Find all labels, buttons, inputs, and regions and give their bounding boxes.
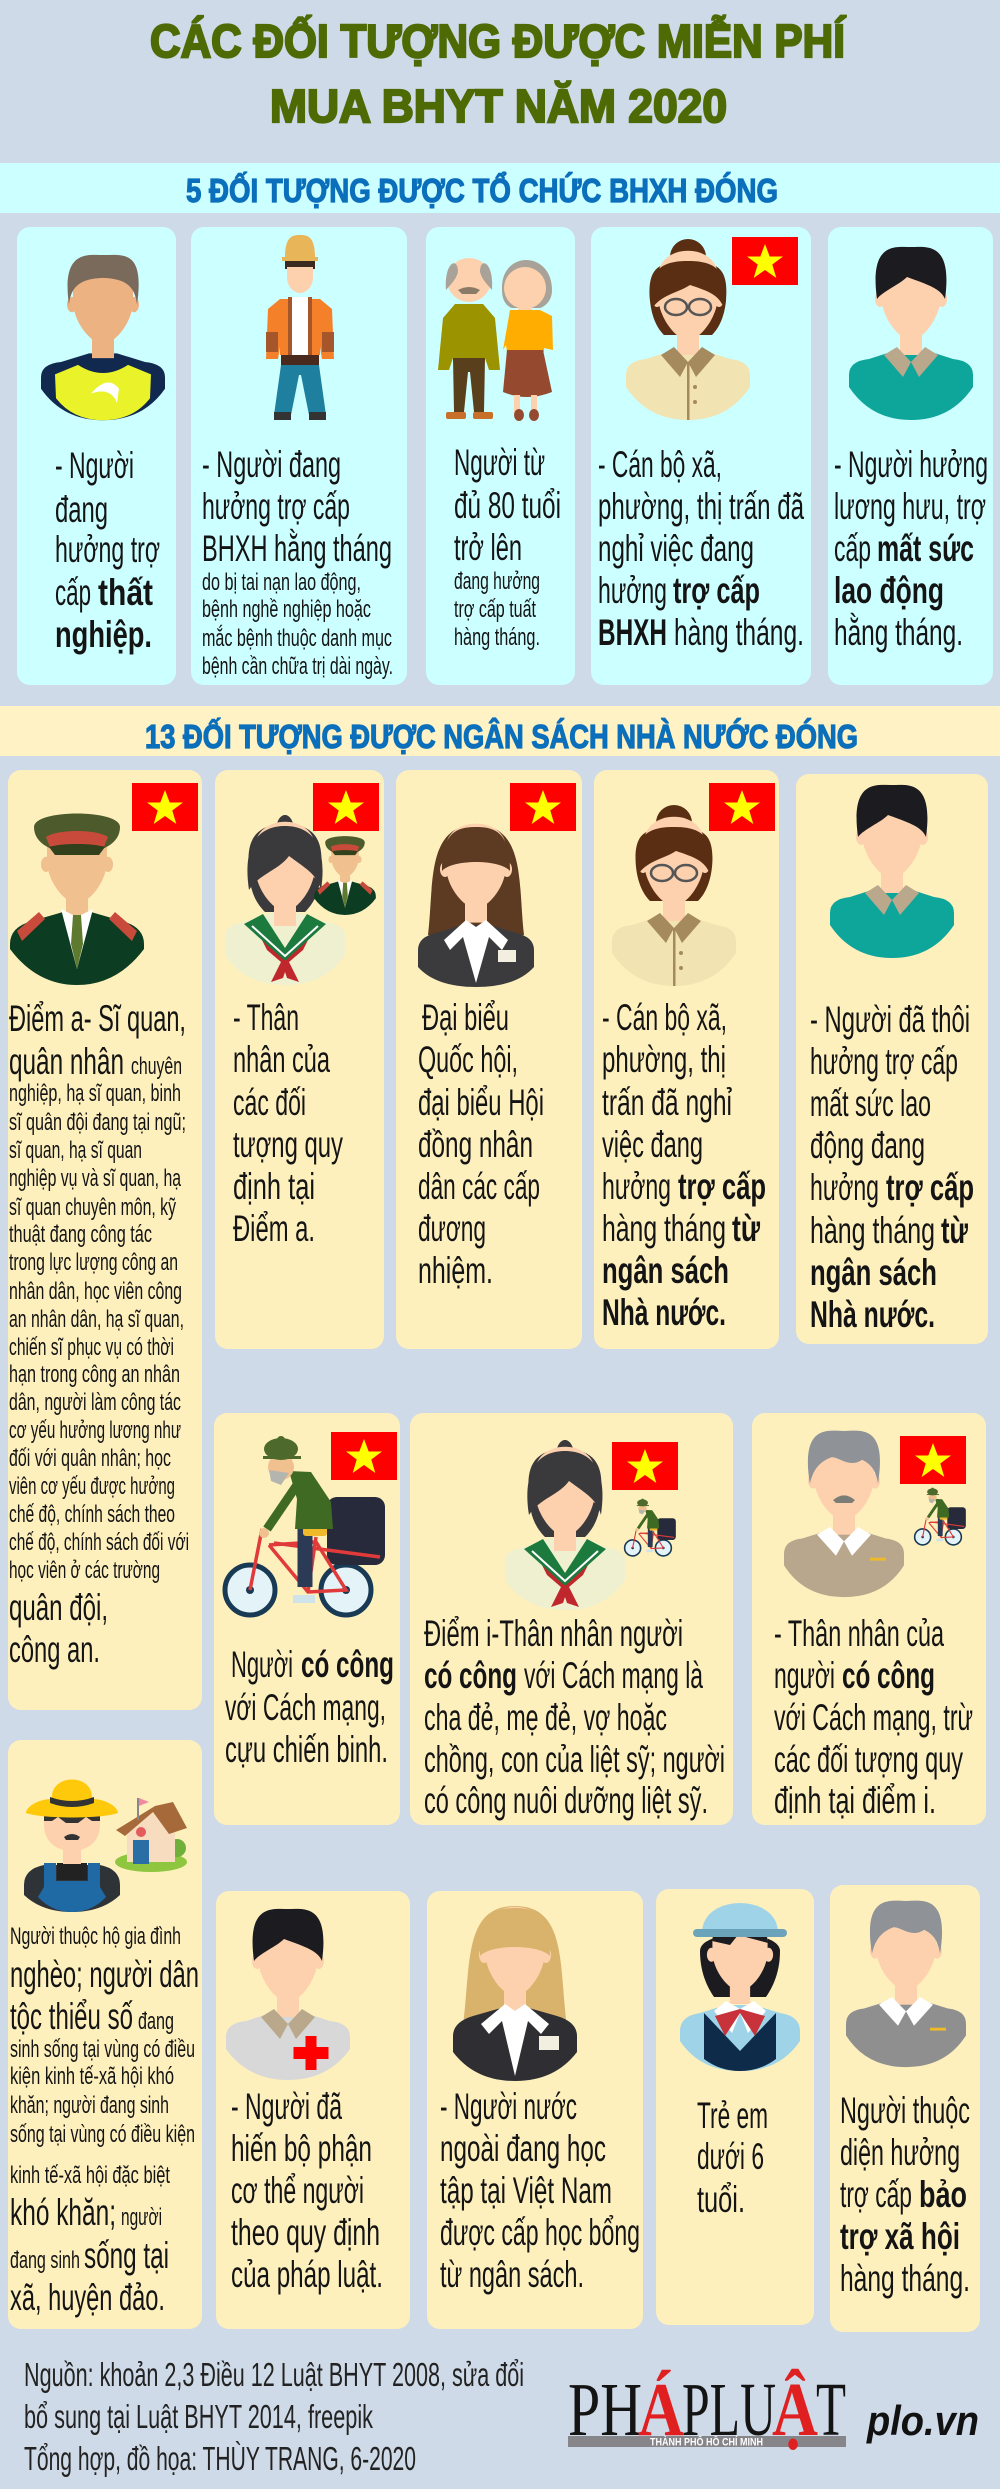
text: poor households and ethnic minorities: kinh tế-xã hội đặc biệt (10, 2162, 170, 2189)
text: unemployed: hưởng trợ (55, 529, 160, 570)
logo: Pháp Luật: T (816, 2368, 846, 2452)
text: children under 6: tuổi. (697, 2179, 745, 2220)
text: officers and soldiers: chế độ, chính sách theo (9, 1501, 175, 1528)
text: officers and soldiers: quân đội, (9, 1587, 108, 1628)
text: unemployed: thất (98, 572, 153, 613)
text: aged 80 and over: trở lên (454, 527, 522, 568)
icon: man with red cross (226, 1909, 350, 2080)
source credits: bổ sung tại Luật BHYT 2014, freepik (24, 2398, 373, 2435)
panel: people with revolutionary merit (214, 1413, 400, 1825)
text: social protection allowance: trợ cấp (840, 2174, 912, 2215)
text: work capacity loss allowance: từ (941, 1210, 968, 1251)
text: relatives of soldiers: - Thân (233, 997, 299, 1038)
text: retired commune officials: hưởng (598, 570, 667, 611)
text: relatives of merit people (774, 1613, 973, 1821)
section band: 13 groups paid by state budget (0, 706, 1000, 756)
panel: national assembly deputies (396, 770, 582, 1349)
text: organ donors: cơ thể người (231, 2170, 364, 2211)
panel: relatives of soldiers (215, 770, 384, 1349)
text: relatives of martyrs: có công nuôi dưỡng liệt sỹ. (424, 1780, 708, 1821)
text: relatives of martyrs: chồng, con của liệt sỹ; người (424, 1739, 725, 1780)
logo: Pháp Luật: Ậ (772, 2368, 818, 2452)
text: aged 80 and over: Người từ (454, 442, 545, 483)
icon: girl with red scarf (225, 815, 345, 985)
text: national assembly deputies: Đại biểu (422, 997, 509, 1038)
panel: work accident allowance (191, 227, 407, 685)
icon: flag (510, 783, 576, 831)
text: retired commune officials: BHXH (598, 612, 667, 653)
text: officers and soldiers: học viên ở các trường (9, 1557, 160, 1584)
text: poor households and ethnic minorities: khó khăn; (10, 2192, 116, 2233)
text: foreign students: được cấp học bổng (440, 2212, 640, 2253)
icon: small cyclist (915, 1488, 966, 1545)
icon: construction worker (266, 235, 334, 420)
text: work capacity loss allowance: hàng tháng (810, 1210, 935, 1251)
text: poor households and ethnic minorities: xã, huyện đảo. (10, 2277, 165, 2318)
text: work capacity loss allowance: ngân sách (810, 1252, 937, 1293)
text: national assembly deputies: đại biểu Hội (418, 1082, 544, 1123)
website: plo.vn: plo.vn (866, 2397, 979, 2444)
text: pensioners: lao động (834, 570, 944, 611)
text: officers and soldiers: chuyên (131, 1053, 182, 1080)
panel: relatives of merit people (752, 1413, 986, 1825)
text: work capacity loss allowance: mất sức lao (810, 1083, 931, 1124)
text: relatives of soldiers: tượng quy (233, 1124, 343, 1165)
text: relatives of soldiers: các đối (233, 1082, 306, 1123)
text: aged 80 and over: đang hưởng (454, 568, 540, 595)
text: poor households and ethnic minorities: đang (138, 2008, 174, 2035)
panel: pensioners (828, 227, 993, 685)
icon: flag (900, 1436, 966, 1484)
text: officers and soldiers: an nhân dân, hạ sĩ quan, (9, 1306, 184, 1333)
icon: small cyclist (625, 1499, 676, 1556)
text: officers and soldiers: sĩ quan, hạ sĩ quan (9, 1137, 142, 1164)
icon: woman with glasses (626, 239, 750, 420)
panel: organ donors (216, 1891, 410, 2329)
text: poor households and ethnic minorities: sống tại (84, 2235, 169, 2276)
logo: Pháp Luật: THÀNH PHỐ HỒ CHÍ MINH (650, 2434, 763, 2448)
text: poor households and ethnic minorities: khăn; người đang sinh (10, 2092, 169, 2119)
text: relatives of soldiers: định tại (233, 1166, 315, 1207)
logo: Pháp Luật: Á (638, 2368, 684, 2452)
text: work capacity loss allowance: hưởng (810, 1167, 879, 1208)
icon: soldier (10, 814, 144, 985)
text: retired commune officials: phường, thị trấn đã (598, 486, 804, 527)
text: commune officials on budget allowance: việc đang (602, 1124, 703, 1165)
text: officers and soldiers: đối với quân nhân; học (9, 1445, 171, 1472)
title (150, 15, 846, 132)
text: unemployed (55, 445, 160, 655)
source credits (24, 2356, 524, 2477)
text: relatives of martyrs: có công (424, 1655, 517, 1696)
panel: officers and soldiers (8, 770, 202, 1710)
text: officers and soldiers: dân, người làm công tác (9, 1389, 181, 1416)
title: CÁC ĐỐI TƯỢNG ĐƯỢC MIỄN PHÍ (150, 15, 846, 67)
text: children under 6 (697, 2095, 768, 2220)
section band: 5 groups paid by social insurance: 5 ĐỐI TƯỢNG ĐƯỢC TỔ CHỨC BHXH ĐÓNG (186, 171, 778, 209)
text: national assembly deputies: nhiệm. (418, 1250, 493, 1291)
text: pensioners (834, 444, 988, 653)
text: pensioners: cấp (834, 528, 871, 569)
text: poor households and ethnic minorities: tộc thiểu số (10, 1996, 133, 2037)
icon: house (115, 1798, 187, 1872)
icon: school child (680, 1903, 800, 2071)
text: officers and soldiers: chiến sĩ phục vụ có thời (9, 1334, 174, 1361)
text: work capacity loss allowance: động đang (810, 1125, 925, 1166)
text: organ donors (231, 2086, 383, 2295)
icon: small soldier (314, 836, 376, 915)
text: national assembly deputies: đương (418, 1208, 486, 1249)
text: retired commune officials (598, 444, 804, 653)
text: work capacity loss allowance (810, 999, 974, 1335)
text: commune officials on budget allowance (602, 997, 766, 1333)
text: work accident allowance (202, 444, 393, 680)
text: commune officials on budget allowance: trợ cấp (678, 1166, 766, 1207)
source credits: Nguồn: khoản 2,3 Điều 12 Luật BHYT 2008, sửa đổi (24, 2356, 524, 2393)
text: national assembly deputies: Quốc hội, (418, 1039, 518, 1080)
text: officers and soldiers: công an. (9, 1629, 100, 1670)
text: officers and soldiers: sĩ quan chuyên môn, kỹ (9, 1194, 176, 1221)
text: commune officials on budget allowance: từ (732, 1208, 760, 1249)
text: work accident allowance: hưởng trợ cấp (202, 486, 350, 527)
icon: woman with glasses (612, 805, 736, 986)
text: officers and soldiers: hạn trong công an nhân (9, 1361, 180, 1388)
text: officers and soldiers: sĩ quân đội đang tại ngũ; (9, 1109, 186, 1136)
panel: commune officials on budget allowance (594, 770, 779, 1349)
logo: Pháp Luật: PLU (682, 2368, 776, 2452)
text: officers and soldiers: cơ yếu hưởng lương như (9, 1417, 181, 1444)
text: work accident allowance: BHXH hằng tháng (202, 528, 392, 569)
text: retired commune officials: - Cán bộ xã, (598, 444, 722, 485)
icon: farmer with yellow hat (24, 1780, 120, 1912)
panel: retired commune officials (591, 227, 811, 685)
text: commune officials on budget allowance: trấn đã nghỉ (602, 1082, 732, 1123)
panel: social protection allowance (830, 1885, 980, 2332)
icon: man in teal sweater (849, 247, 973, 420)
text: relatives of soldiers: nhân của (233, 1039, 330, 1080)
text: relatives of merit people: người (774, 1655, 835, 1696)
text: relatives of soldiers (233, 997, 343, 1249)
panel: children under 6 (656, 1889, 814, 2325)
text: social protection allowance (840, 2090, 970, 2299)
text: work accident allowance: - Người đang (202, 444, 341, 485)
text: relatives of martyrs: Điểm i-Thân nhân người (424, 1613, 683, 1654)
text: retired commune officials: nghỉ việc đang (598, 528, 754, 569)
text: people with revolutionary merit: cựu chiến binh. (225, 1729, 388, 1770)
title: MUA BHYT NĂM 2020 (270, 80, 727, 132)
text: officers and soldiers: Điểm a- Sĩ quan, (9, 998, 186, 1039)
text: commune officials on budget allowance: - Cán bộ xã, (602, 997, 727, 1038)
text: officers and soldiers: chế độ, chính sách đối với (9, 1529, 189, 1556)
text: unemployed: đang (55, 489, 108, 530)
icon: girl with red scarf (505, 1440, 625, 1610)
text: work accident allowance: mắc bệnh thuộc danh mục (202, 625, 392, 652)
text: work accident allowance: bệnh nghề nghiệp hoặc (202, 596, 371, 623)
text: commune officials on budget allowance: hưởng (602, 1166, 671, 1207)
text: aged 80 and over: hàng tháng. (454, 624, 540, 651)
text: poor households and ethnic minorities: nghèo; người dân (10, 1954, 199, 1995)
icon: man in teal sweater (830, 785, 954, 958)
panel: work capacity loss allowance (796, 774, 988, 1344)
icon: grey-haired man (784, 1431, 904, 1597)
text: foreign students (440, 2086, 640, 2295)
text: foreign students: tập tại Việt Nam (440, 2170, 612, 2211)
text: work accident allowance: do bị tai nạn lao động, (202, 569, 361, 596)
text: aged 80 and over (454, 442, 561, 651)
text: officers and soldiers: quân nhân (9, 1041, 124, 1082)
text: national assembly deputies: đồng nhân (418, 1124, 533, 1165)
icon: blonde woman in blazer (453, 1906, 577, 2081)
text: officers and soldiers: viên cơ yếu được hưởng (9, 1473, 175, 1500)
text: national assembly deputies (418, 997, 544, 1291)
text: national assembly deputies: dân các cấp (418, 1166, 540, 1207)
text: organ donors: - Người đã (231, 2086, 342, 2127)
text: officers and soldiers: nghiệp vụ và sĩ quan, hạ (9, 1165, 181, 1192)
source credits: Tổng hợp, đồ họa: THÙY TRANG, 6-2020 (24, 2440, 416, 2477)
text: people with revolutionary merit: Người (231, 1644, 293, 1685)
icon: flag (132, 783, 198, 831)
text: organ donors: hiến bộ phận (231, 2128, 372, 2169)
text: foreign students: ngoài đang học (440, 2128, 606, 2169)
icon: flag (709, 783, 775, 831)
icon: woman with long hair in blazer (418, 824, 534, 987)
icon: flag (732, 237, 798, 285)
icon: elderly couple (438, 258, 553, 421)
icon: grey-haired man in grey sweater (846, 1901, 966, 2067)
text: work capacity loss allowance: Nhà nước. (810, 1294, 935, 1335)
text: aged 80 and over: trợ cấp tuất (454, 596, 536, 623)
icon: flag (313, 783, 379, 831)
icon: man in yellow shirt (41, 255, 165, 420)
text: social protection allowance: bảo (919, 2174, 967, 2215)
text: unemployed: - Người (55, 445, 134, 486)
text: officers and soldiers: nghiệp, hạ sĩ quan, binh (9, 1080, 181, 1107)
text: children under 6: dưới 6 (697, 2136, 764, 2177)
text: commune officials on budget allowance: phường, thị (602, 1039, 726, 1080)
text: organ donors: của pháp luật. (231, 2254, 383, 2295)
text: children under 6: Trẻ em (697, 2095, 768, 2136)
panel: foreign students (427, 1891, 643, 2329)
text: officers and soldiers: nhân dân, học viên công (9, 1278, 182, 1305)
logo: Pháp Luật (568, 2368, 846, 2452)
icon: flag (612, 1442, 678, 1490)
text: poor households and ethnic minorities (10, 1923, 199, 2318)
text: officers and soldiers (9, 998, 189, 1670)
text: retired commune officials: trợ cấp (673, 570, 760, 611)
text: poor households and ethnic minorities: sống tại vùng có điều kiện (10, 2121, 195, 2148)
text: foreign students: từ ngân sách. (440, 2254, 584, 2295)
panel: relatives of martyrs (410, 1413, 733, 1825)
text: relatives of merit people: có công (842, 1655, 935, 1696)
text: poor households and ethnic minorities: Người thuộc hộ gia đình (10, 1923, 181, 1950)
text: poor households and ethnic minorities: đang sinh (10, 2247, 80, 2274)
text: relatives of martyrs: cha đẻ, mẹ đẻ, vợ hoặc (424, 1697, 667, 1738)
section band: 13 groups paid by state budget: 13 ĐỐI TƯỢNG ĐƯỢC NGÂN SÁCH NHÀ NƯỚC ĐÓNG (145, 717, 858, 755)
text: organ donors: theo quy định (231, 2212, 380, 2253)
text: people with revolutionary merit: với Cách mạng, (225, 1687, 386, 1728)
text: commune officials on budget allowance: hàng tháng (602, 1208, 726, 1249)
text: aged 80 and over: đủ 80 tuổi (454, 485, 561, 526)
panel: aged 80 and over (426, 227, 575, 685)
text: poor households and ethnic minorities: người (121, 2204, 162, 2231)
panel: poor households and ethnic minorities (8, 1740, 202, 2329)
text: relatives of martyrs (424, 1613, 725, 1821)
text: commune officials on budget allowance: Nhà nước. (602, 1292, 726, 1333)
text: officers and soldiers: thuật đang công tác (9, 1221, 152, 1248)
text: relatives of martyrs: với Cách mạng là (524, 1655, 703, 1696)
section band: 5 groups paid by social insurance (0, 163, 1000, 213)
panel: unemployed (17, 227, 176, 685)
text: commune officials on budget allowance: ngân sách (602, 1250, 729, 1291)
text: poor households and ethnic minorities: kiện kinh tế-xã hội khó (10, 2063, 174, 2090)
text: poor households and ethnic minorities: sinh sống tại vùng có điều (10, 2036, 195, 2063)
text: people with revolutionary merit (225, 1644, 394, 1770)
logo: Pháp Luật: PH (568, 2368, 642, 2452)
text: relatives of soldiers: Điểm a. (233, 1208, 315, 1249)
text: unemployed: cấp (55, 572, 91, 613)
text: people with revolutionary merit: có công (301, 1644, 394, 1685)
text: work accident allowance: bệnh cần chữa trị dài ngày. (202, 653, 393, 680)
text: retired commune officials: hàng tháng. (674, 612, 804, 653)
text: unemployed: nghiệp. (55, 614, 152, 655)
text: officers and soldiers: trong lực lượng công an (9, 1249, 178, 1276)
text: foreign students: - Người nước (440, 2086, 577, 2127)
icon: veteran on bicycle (225, 1436, 385, 1615)
icon: flag (331, 1432, 397, 1480)
